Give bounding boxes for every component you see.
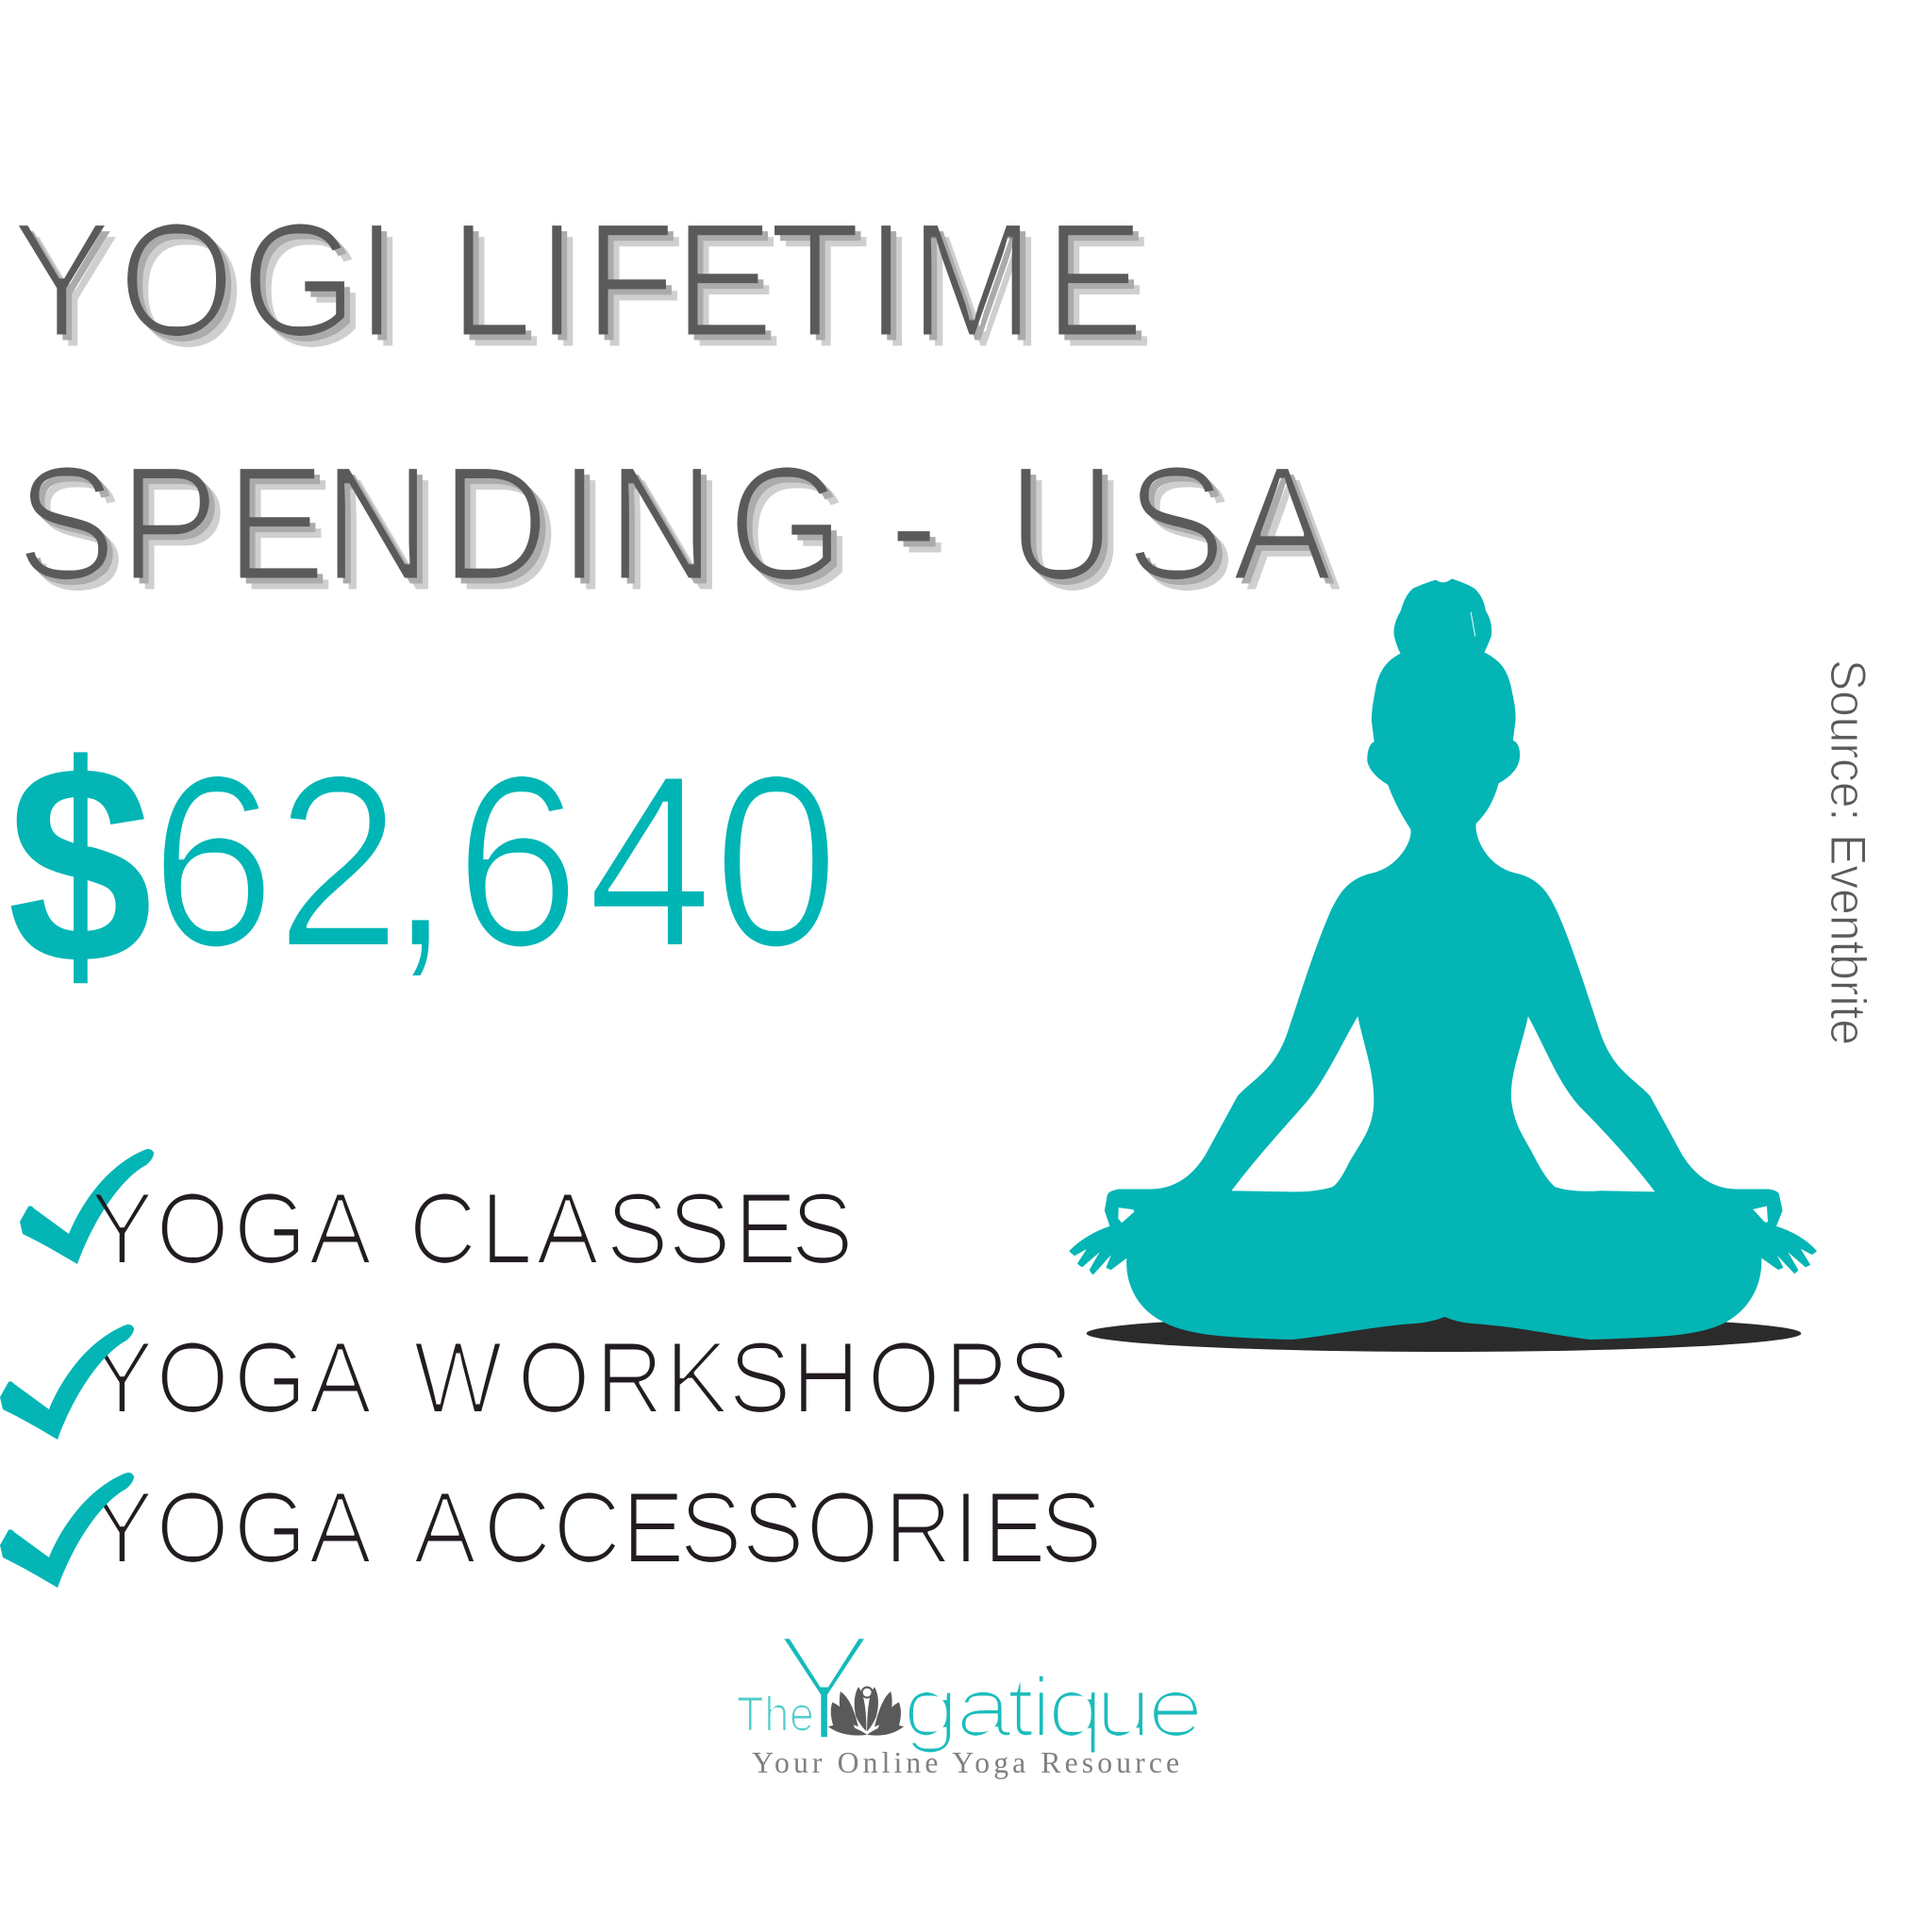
silhouette xyxy=(1070,579,1816,1339)
check mark 2 xyxy=(0,1324,134,1440)
ground shadow xyxy=(1087,1315,1801,1352)
logo letter: Y: Y xyxy=(774,1606,874,1771)
label: yoga classes: YOGA CLASSES xyxy=(91,1173,854,1286)
source note: Source: Eventbrite xyxy=(1820,659,1875,1045)
logo tagline: Your Online Yoga Resource xyxy=(752,1746,1179,1779)
item: yoga workshops xyxy=(0,1322,1071,1440)
hair highlight xyxy=(1471,612,1475,637)
title line 2: SPENDING - USA xyxy=(16,434,1333,614)
checklist xyxy=(0,1149,1103,1588)
meditating figure xyxy=(1070,579,1816,1352)
logo word: gatique: gatique xyxy=(902,1661,1205,1754)
label: yoga accessories: YOGA ACCESSORIES xyxy=(91,1472,1103,1585)
label: yoga workshops: YOGA WORKSHOPS xyxy=(91,1322,1071,1435)
logo xyxy=(737,1606,1205,1779)
dollar sign: $ xyxy=(8,707,153,1024)
icon: lotus xyxy=(828,1687,904,1736)
logo word: The: The xyxy=(737,1687,814,1740)
title line 1: YOGI LIFETIME xyxy=(11,191,1144,371)
item: yoga accessories xyxy=(0,1472,1103,1588)
title xyxy=(11,191,1333,614)
item: yoga classes xyxy=(20,1149,854,1286)
check mark 3 xyxy=(0,1473,134,1588)
amount figures: 62,640 xyxy=(150,724,840,997)
check mark 1 xyxy=(20,1149,154,1264)
spending amount xyxy=(8,707,840,1024)
